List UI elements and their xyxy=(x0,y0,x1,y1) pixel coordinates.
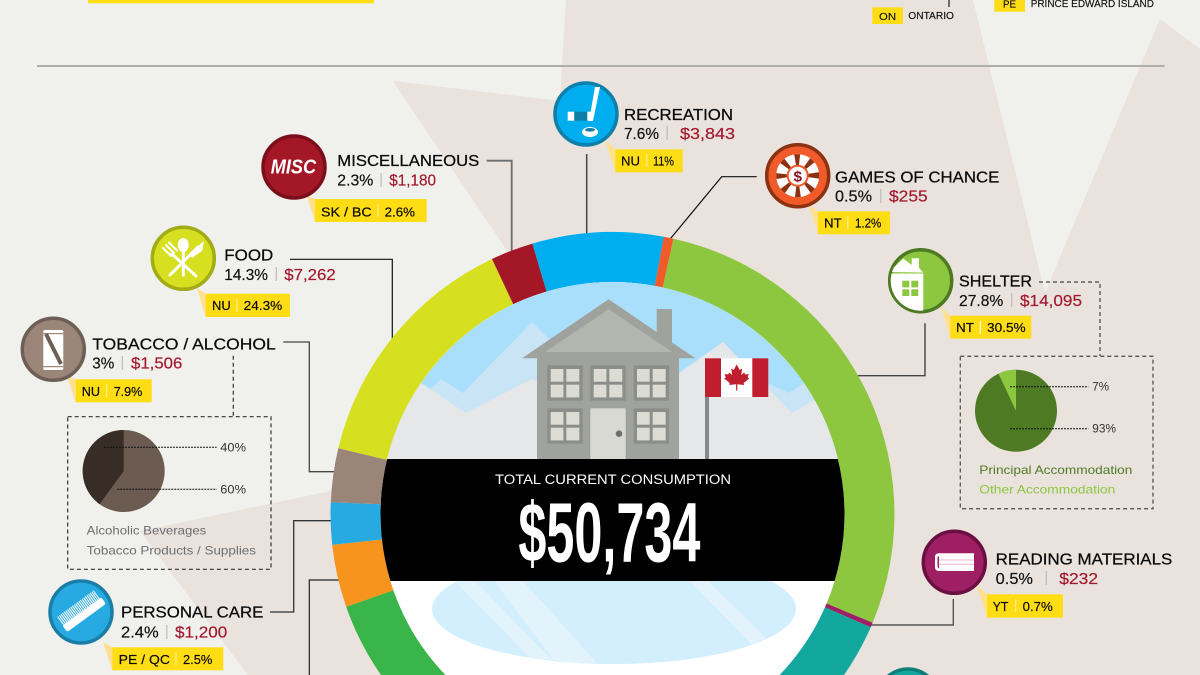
donut chart: consumption ring xyxy=(331,232,894,675)
panel: recreation xyxy=(555,83,735,172)
panel: reading materials: 0.5% xyxy=(996,571,1033,588)
icon: comb xyxy=(50,581,112,643)
icon: book xyxy=(923,531,985,593)
icon: roulette wheel xyxy=(767,145,829,207)
panel: food xyxy=(152,227,336,317)
panel: tobacco breakdown: Alcoholic Beverages xyxy=(87,523,206,537)
panel: recreation: 7.6% xyxy=(624,126,659,143)
panel: personal care: PE / QC xyxy=(119,652,170,667)
panel: games of chance: NT xyxy=(824,215,842,230)
panel: shelter breakdown: 93% xyxy=(1092,422,1116,436)
icon: house badge xyxy=(889,250,952,312)
panel: games of chance: GAMES OF CHANCE xyxy=(835,169,999,186)
centre scene xyxy=(380,282,850,675)
connector lines xyxy=(270,154,953,675)
panel: miscellaneous: MISCELLANEOUS xyxy=(337,153,479,170)
panel: personal care: 2.4% xyxy=(121,624,159,641)
panel: shelter: 30.5% xyxy=(987,320,1026,335)
panel: food: 24.3% xyxy=(244,298,283,313)
panel: tobacco and alcohol: 7.9% xyxy=(114,384,143,399)
province legend: ONTARIO xyxy=(908,11,954,22)
panel: reading materials: READING MATERIALS xyxy=(996,552,1172,569)
panel: recreation: NU xyxy=(621,154,640,169)
icon: fork spoon knife xyxy=(152,227,214,289)
panel: reading materials: 0.7% xyxy=(1023,599,1053,614)
icon: hockey stick xyxy=(555,83,617,145)
panel: food: $7,262 xyxy=(284,267,336,284)
icon: misc badge: MISC xyxy=(271,156,317,178)
panel: tobacco breakdown xyxy=(68,356,271,569)
panel: miscellaneous: 2.6% xyxy=(385,205,415,220)
pie chart: shelter xyxy=(975,370,1088,452)
province legend: ON xyxy=(879,12,896,23)
panel: miscellaneous: 2.3% xyxy=(337,172,373,189)
divider xyxy=(37,65,1164,67)
pie chart: tobacco xyxy=(83,430,217,512)
panel: food: FOOD xyxy=(224,248,273,265)
panel: personal care: 2.5% xyxy=(183,652,213,667)
panel: personal care: PERSONAL CARE xyxy=(121,605,263,622)
panel: shelter breakdown: Principal Accommodation xyxy=(979,463,1132,477)
panel: food: NU xyxy=(212,298,231,313)
panel: tobacco and alcohol xyxy=(22,318,276,402)
panel: miscellaneous: $1,180 xyxy=(389,172,436,189)
panel: miscellaneous xyxy=(263,136,479,222)
panel: food: 14.3% xyxy=(224,267,268,284)
panel: shelter: 27.8% xyxy=(959,293,1003,310)
panel: reading materials: YT xyxy=(993,599,1008,614)
icon: misc badge xyxy=(263,136,325,198)
panel: miscellaneous: SK / BC xyxy=(321,205,372,220)
panel: reading materials xyxy=(923,531,1172,618)
panel: tobacco and alcohol: TOBACCO / ALCOHOL xyxy=(92,336,276,353)
icon: teal badge xyxy=(887,667,929,675)
icon: roulette wheel: $ xyxy=(794,168,803,186)
icon: canadian flag xyxy=(705,358,768,459)
panel: recreation: 11% xyxy=(653,154,674,169)
panel: games of chance: 0.5% xyxy=(835,189,872,206)
panel: shelter breakdown xyxy=(960,282,1153,509)
icon: can xyxy=(22,318,84,380)
panel: shelter breakdown: Other Accommodation xyxy=(979,483,1115,497)
panel: tobacco and alcohol: NU xyxy=(82,384,100,399)
total band: TOTAL CURRENT CONSUMPTION xyxy=(495,472,731,487)
panel: games of chance xyxy=(767,145,999,234)
total band: $50,734 xyxy=(518,486,701,580)
panel: shelter: $14,095 xyxy=(1020,293,1082,310)
panel: shelter: NT xyxy=(956,320,974,335)
panel: tobacco breakdown: 40% xyxy=(220,441,246,455)
panel: shelter: SHELTER xyxy=(959,274,1032,291)
icon: house xyxy=(522,299,695,459)
panel: games of chance: $255 xyxy=(889,189,928,206)
panel: tobacco and alcohol: 3% xyxy=(92,356,114,373)
top yellow bar xyxy=(88,0,374,3)
panel: recreation: RECREATION xyxy=(624,107,733,124)
panel: shelter breakdown: 7% xyxy=(1092,380,1109,394)
total band xyxy=(380,459,845,581)
panel: tobacco breakdown: 60% xyxy=(220,482,246,496)
panel: games of chance: 1.2% xyxy=(855,215,882,230)
panel: personal care: $1,200 xyxy=(175,624,227,641)
panel: personal care xyxy=(50,581,263,670)
province legend xyxy=(872,0,1154,24)
panel: tobacco breakdown: Tobacco Products / Supplies xyxy=(87,543,256,557)
panel: shelter xyxy=(889,250,1082,339)
panel: recreation: $3,843 xyxy=(680,126,735,143)
panel: reading materials: $232 xyxy=(1059,571,1098,588)
panel: tobacco and alcohol: $1,506 xyxy=(131,356,182,373)
